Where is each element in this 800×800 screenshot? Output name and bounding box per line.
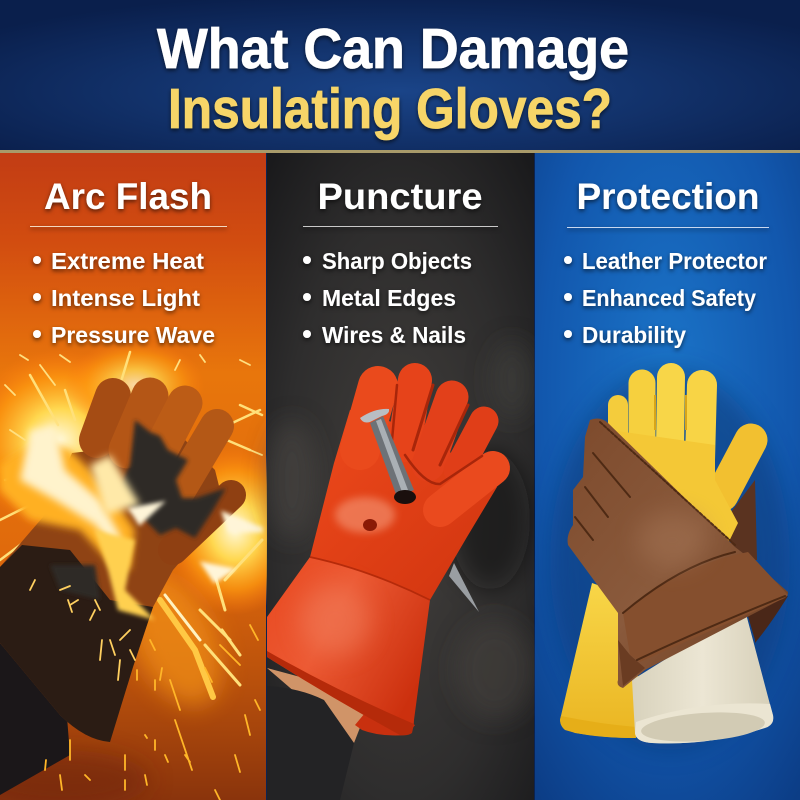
bullet list [564, 248, 767, 348]
streaks behind glove [0, 352, 262, 697]
bullet list [33, 248, 215, 348]
heading: Arc Flash: Arc Flash [44, 176, 212, 217]
bullet list: Pressure Wave [51, 322, 215, 348]
background mottling [267, 340, 535, 720]
glove shadow [550, 370, 790, 750]
icon: dark sleeve [0, 643, 70, 795]
icon: sleeve and wrist [267, 668, 368, 800]
bullet list: Enhanced Safety [582, 285, 756, 311]
header banner [0, 0, 800, 153]
icon: punctured red glove [267, 380, 497, 735]
panel: arc flash [0, 153, 305, 800]
heading: Protection: Protection [576, 176, 760, 217]
title line 2: Insulating Gloves? [168, 77, 612, 141]
icon: cream inner cuff [632, 610, 773, 745]
flash burst on glove [0, 425, 262, 620]
bullet list: Sharp Objects [322, 248, 472, 274]
panel: protection [535, 153, 800, 800]
panel: puncture [267, 153, 535, 800]
icon: brown back glove [725, 480, 757, 560]
char marks [50, 420, 226, 600]
bullet list: Extreme Heat [51, 248, 204, 274]
bullet list: Leather Protector [582, 248, 767, 274]
bullet list: Intense Light [51, 285, 200, 311]
column: protection text [564, 176, 769, 348]
icon: yellow glove [560, 377, 751, 738]
bullet list [303, 248, 472, 348]
sparks [5, 355, 262, 800]
icon: nail [360, 409, 479, 612]
bullet list: Durability [582, 322, 686, 348]
heading: Puncture: Puncture [318, 176, 482, 217]
explosion glow [0, 340, 305, 800]
column: arc flash text [30, 176, 227, 348]
bullet list: Wires & Nails [322, 322, 466, 348]
icon: burnt glove [0, 396, 231, 742]
bullet list: Metal Edges [322, 285, 456, 311]
puncture hole [363, 519, 377, 531]
title line 1: What Can Damage [157, 17, 629, 81]
column: puncture text [303, 176, 498, 348]
icon: brown leather glove [568, 419, 788, 688]
